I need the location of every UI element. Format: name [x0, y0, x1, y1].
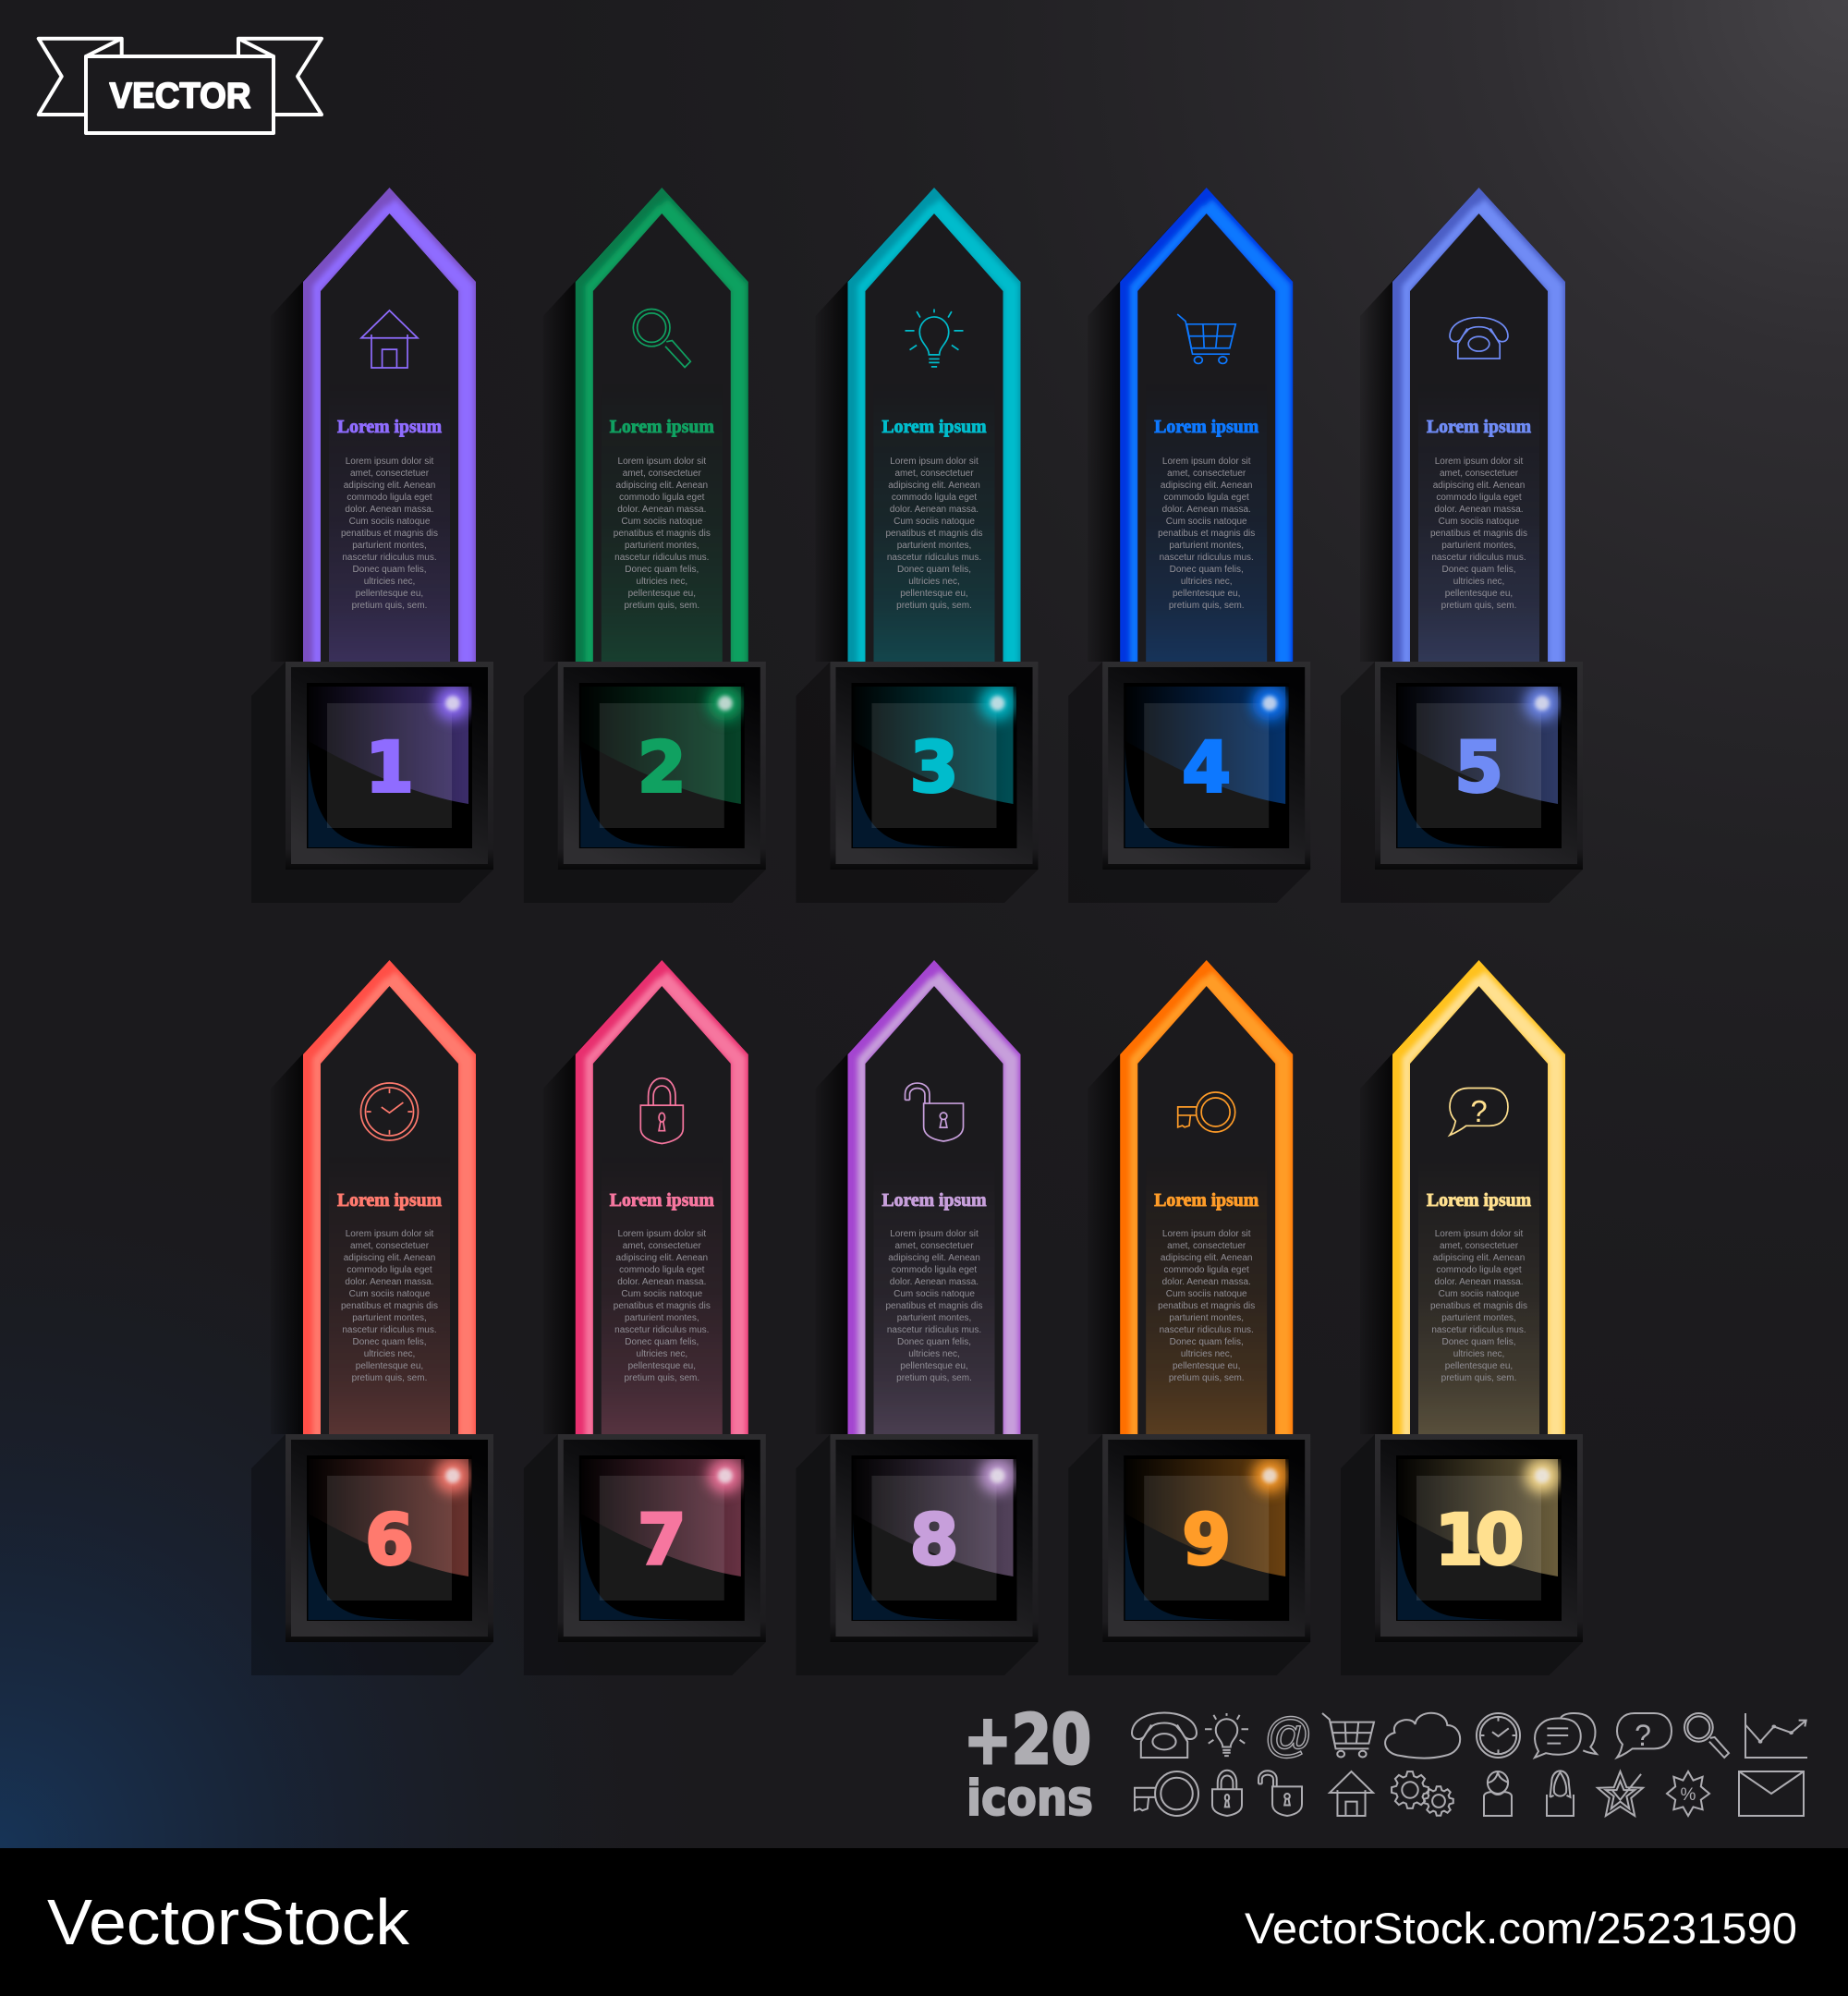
icon: telephone [1132, 1713, 1197, 1758]
text block: commodo ligula eget [619, 493, 705, 503]
text block: parturient montes, [625, 1313, 699, 1323]
number box 5 [1375, 662, 1583, 870]
icon: question speech bubble [1450, 1089, 1508, 1135]
icon: woman [1547, 1771, 1574, 1816]
icon set: twenty outline icons [1132, 1709, 1807, 1816]
text block: amet, consectetuer [1440, 1241, 1519, 1251]
number box 9 [1102, 1434, 1310, 1642]
text block: ultricies nec, [908, 1349, 960, 1359]
text block: pretium quis, sem. [896, 1373, 972, 1383]
text block: commodo ligula eget [1436, 493, 1522, 503]
number box 7 [558, 1434, 766, 1642]
heading: +20 icons: +20 [964, 1700, 1091, 1780]
text block: commodo ligula eget [892, 493, 977, 503]
number box 6: 6 [365, 1499, 414, 1580]
text block: ultricies nec, [908, 577, 960, 587]
text block: adipiscing elit. Aenean [1433, 481, 1525, 491]
arrow frame 6 [251, 960, 493, 1675]
text block: dolor. Aenean massa. [617, 1277, 706, 1287]
panel: card 8 [796, 960, 1039, 1675]
text block: parturient montes, [1441, 1313, 1516, 1323]
arrow frame 2 [524, 188, 766, 903]
text block: ultricies nec, [637, 1349, 687, 1359]
text block: dolor. Aenean massa. [890, 1277, 979, 1287]
text block: Lorem ipsum dolor sit [1435, 1229, 1524, 1239]
text block: commodo ligula eget [1164, 1265, 1249, 1275]
text block: adipiscing elit. Aenean [1161, 481, 1252, 491]
text block: Donec quam felis, [352, 565, 427, 575]
text block: pellentesque eu, [356, 1361, 423, 1371]
arrow frame 3 [796, 188, 1039, 903]
text block: amet, consectetuer [1440, 469, 1519, 479]
text block: adipiscing elit. Aenean [344, 1253, 435, 1263]
text block: pretium quis, sem. [1441, 1373, 1516, 1383]
icon: chat bubbles [1535, 1713, 1597, 1758]
text block: pellentesque eu, [1445, 1361, 1513, 1371]
icon: magnifier [633, 309, 690, 368]
icon: chart [1745, 1713, 1807, 1758]
heading: +20 icons: icons [967, 1771, 1093, 1827]
text block: Cum sociis natoque [894, 517, 975, 527]
text block: penatibus et magnis dis [1430, 1301, 1527, 1311]
icon: closed lock [640, 1078, 683, 1144]
heading: +20 icons [964, 1700, 1093, 1827]
panel: card 10 [1341, 960, 1583, 1675]
text block: Cum sociis natoque [349, 517, 431, 527]
text block: nascetur ridiculus mus. [614, 553, 709, 563]
text block: dolor. Aenean massa. [345, 505, 434, 515]
text block: adipiscing elit. Aenean [1433, 1253, 1525, 1263]
text block: pellentesque eu, [356, 589, 423, 599]
text block: Donec quam felis, [625, 1337, 699, 1347]
number box 3 [830, 662, 1039, 870]
text block: adipiscing elit. Aenean [344, 481, 435, 491]
arrow frame 9 [1068, 960, 1310, 1675]
text block: dolor. Aenean massa. [1434, 1277, 1524, 1287]
text block: amet, consectetuer [894, 1241, 974, 1251]
text block: dolor. Aenean massa. [1162, 505, 1251, 515]
text block: nascetur ridiculus mus. [342, 1325, 437, 1335]
text block: dolor. Aenean massa. [345, 1277, 434, 1287]
text block: amet, consectetuer [350, 1241, 430, 1251]
text block: Donec quam felis, [352, 1337, 427, 1347]
text block: pellentesque eu, [1173, 589, 1240, 599]
text block: Donec quam felis, [1441, 1337, 1516, 1347]
text block: nascetur ridiculus mus. [342, 553, 437, 563]
footer brand: VectorStock [47, 1886, 410, 1958]
text block: pretium quis, sem. [1441, 601, 1516, 611]
icon: star with check [1598, 1771, 1643, 1816]
arrow frame 8 [796, 960, 1039, 1675]
text block: pretium quis, sem. [624, 601, 699, 611]
panel: card 4 [1068, 188, 1310, 903]
text block: ultricies nec, [1453, 1349, 1504, 1359]
text block: Lorem ipsum dolor sit [1435, 456, 1524, 467]
text block: amet, consectetuer [1167, 1241, 1246, 1251]
number box 6 [286, 1434, 493, 1642]
heading: Lorem ipsum [881, 1190, 987, 1211]
text block: Lorem ipsum dolor sit [890, 456, 979, 467]
text block: adipiscing elit. Aenean [616, 481, 708, 491]
text block: adipiscing elit. Aenean [888, 1253, 980, 1263]
panel: card 5 [1341, 188, 1583, 903]
number box 4: 4 [1182, 726, 1231, 808]
icon: question bubble: ? [1635, 1719, 1651, 1752]
text block: pellentesque eu, [628, 1361, 696, 1371]
text block: parturient montes, [625, 541, 699, 551]
text block: pretium quis, sem. [896, 601, 972, 611]
heading: Lorem ipsum [337, 1190, 442, 1211]
panel: card 1 [251, 188, 493, 903]
text block: Cum sociis natoque [621, 517, 703, 527]
text block: Donec quam felis, [1170, 1337, 1244, 1347]
number box 9: 9 [1182, 1499, 1231, 1580]
number box 2 [558, 662, 766, 870]
text block: pretium quis, sem. [624, 1373, 699, 1383]
text block: Cum sociis natoque [1439, 1289, 1520, 1299]
text block: commodo ligula eget [619, 1265, 705, 1275]
heading: Lorem ipsum [1154, 1190, 1259, 1211]
icon: clock [360, 1083, 418, 1140]
badge: vector ribbon [39, 39, 322, 133]
number box 10: 10 [1435, 1499, 1521, 1580]
text block: ultricies nec, [364, 1349, 415, 1359]
icon: clock [1477, 1713, 1520, 1758]
icon: bulb [1205, 1713, 1248, 1756]
icon: key [1135, 1771, 1198, 1816]
text block: pellentesque eu, [900, 589, 968, 599]
number box 5: 5 [1454, 726, 1503, 808]
text block: Cum sociis natoque [1166, 1289, 1247, 1299]
text block: pretium quis, sem. [352, 1373, 427, 1383]
text block: parturient montes, [897, 1313, 971, 1323]
text block: Lorem ipsum dolor sit [890, 1229, 979, 1239]
text block: commodo ligula eget [346, 1265, 432, 1275]
panel: card 6 [251, 960, 493, 1675]
text block: Donec quam felis, [1170, 565, 1244, 575]
arrow frame 5 [1341, 188, 1583, 903]
arrow frame 1 [251, 188, 493, 903]
icon: gears [1392, 1771, 1453, 1816]
text block: Cum sociis natoque [621, 1289, 703, 1299]
arrow frame 10 [1341, 960, 1583, 1675]
text block: commodo ligula eget [1436, 1265, 1522, 1275]
icon: shopping cart [1177, 314, 1235, 363]
text block: dolor. Aenean massa. [890, 505, 979, 515]
heading: Lorem ipsum [610, 417, 714, 437]
text block: pellentesque eu, [1445, 589, 1513, 599]
heading: Lorem ipsum [1154, 417, 1259, 437]
icon: house [1330, 1771, 1373, 1816]
text block: pretium quis, sem. [1169, 1373, 1245, 1383]
number box 3: 3 [910, 726, 958, 808]
heading: Lorem ipsum [337, 417, 442, 437]
text block: ultricies nec, [1453, 577, 1504, 587]
panel: card 7 [524, 960, 766, 1675]
text block: Lorem ipsum dolor sit [346, 456, 434, 467]
text block: ultricies nec, [364, 577, 415, 587]
text block: Cum sociis natoque [349, 1289, 431, 1299]
icon: telephone [1450, 318, 1508, 359]
icon: open lock [1258, 1771, 1302, 1816]
icon: question bubble [1617, 1713, 1672, 1758]
text block: ultricies nec, [1181, 1349, 1232, 1359]
text block: dolor. Aenean massa. [617, 505, 706, 515]
text block: Lorem ipsum dolor sit [618, 1229, 706, 1239]
text block: amet, consectetuer [1167, 469, 1246, 479]
icon: question speech bubble: ? [1470, 1094, 1488, 1128]
icon: percent badge: % [1681, 1785, 1696, 1805]
icon: percent badge [1667, 1771, 1709, 1816]
text block: parturient montes, [352, 541, 427, 551]
heading: Lorem ipsum [1427, 1190, 1531, 1211]
text block: commodo ligula eget [346, 493, 432, 503]
text block: Cum sociis natoque [1439, 517, 1520, 527]
text block: penatibus et magnis dis [341, 1301, 438, 1311]
text block: nascetur ridiculus mus. [1160, 1325, 1254, 1335]
text block: Cum sociis natoque [1166, 517, 1247, 527]
text block: nascetur ridiculus mus. [887, 553, 981, 563]
heading: Lorem ipsum [881, 417, 987, 437]
text block: parturient montes, [897, 541, 971, 551]
icon: envelope [1739, 1771, 1804, 1816]
text block: amet, consectetuer [350, 469, 430, 479]
text block: adipiscing elit. Aenean [888, 481, 980, 491]
text block: nascetur ridiculus mus. [614, 1325, 709, 1335]
icon: house [361, 310, 418, 368]
text block: Donec quam felis, [625, 565, 699, 575]
panel: card 9 [1068, 960, 1310, 1675]
text block: penatibus et magnis dis [614, 1301, 711, 1311]
text block: dolor. Aenean massa. [1162, 1277, 1251, 1287]
text block: Lorem ipsum dolor sit [1162, 456, 1251, 467]
icon: open lock [906, 1083, 963, 1141]
text block: penatibus et magnis dis [1158, 1301, 1255, 1311]
text block: pretium quis, sem. [352, 601, 427, 611]
arrow frame 4 [1068, 188, 1310, 903]
text block: commodo ligula eget [1164, 493, 1249, 503]
text block: penatibus et magnis dis [885, 1301, 983, 1311]
panel: card 3 [796, 188, 1039, 903]
text block: Donec quam felis, [897, 565, 971, 575]
icon: key [1178, 1092, 1235, 1132]
text block: penatibus et magnis dis [614, 529, 711, 539]
text block: Cum sociis natoque [894, 1289, 975, 1299]
text block: nascetur ridiculus mus. [887, 1325, 981, 1335]
icon: magnifier [1684, 1713, 1729, 1758]
number box 4 [1102, 662, 1310, 870]
number box 1 [286, 662, 493, 870]
text block: penatibus et magnis dis [1430, 529, 1527, 539]
text block: penatibus et magnis dis [885, 529, 983, 539]
text block: penatibus et magnis dis [1158, 529, 1255, 539]
icon: at sign: @ [1264, 1709, 1313, 1762]
icon: light bulb [906, 309, 963, 367]
text block: nascetur ridiculus mus. [1160, 553, 1254, 563]
text block: parturient montes, [1441, 541, 1516, 551]
number box 8: 8 [910, 1499, 958, 1580]
icon: cart [1322, 1713, 1374, 1758]
text block: ultricies nec, [1181, 577, 1232, 587]
text block: Donec quam felis, [897, 1337, 971, 1347]
heading: Lorem ipsum [1427, 417, 1531, 437]
text block: pellentesque eu, [1173, 1361, 1240, 1371]
text block: adipiscing elit. Aenean [1161, 1253, 1252, 1263]
text block: adipiscing elit. Aenean [616, 1253, 708, 1263]
panel: card 2 [524, 188, 766, 903]
text block: commodo ligula eget [892, 1265, 977, 1275]
text block: parturient montes, [1169, 1313, 1244, 1323]
text block: parturient montes, [1169, 541, 1244, 551]
text block: amet, consectetuer [623, 1241, 701, 1251]
text block: amet, consectetuer [894, 469, 974, 479]
text block: Donec quam felis, [1441, 565, 1516, 575]
number box 1: 1 [365, 726, 414, 808]
text block: pellentesque eu, [628, 589, 696, 599]
text block: Lorem ipsum dolor sit [618, 456, 706, 467]
text block: nascetur ridiculus mus. [1431, 1325, 1526, 1335]
text block: dolor. Aenean massa. [1434, 505, 1524, 515]
icon: lock [1212, 1771, 1242, 1816]
number box 2: 2 [638, 726, 687, 808]
icon: man [1484, 1771, 1512, 1816]
footer url: VectorStock.com/25231590 [1245, 1904, 1797, 1953]
text block: parturient montes, [352, 1313, 427, 1323]
text block: pretium quis, sem. [1169, 601, 1245, 611]
footer bar [0, 1848, 1848, 1996]
text block: pellentesque eu, [900, 1361, 968, 1371]
icon: cloud [1385, 1713, 1460, 1759]
badge: vector ribbon: VECTOR [109, 76, 251, 116]
text block: penatibus et magnis dis [341, 529, 438, 539]
text block: nascetur ridiculus mus. [1431, 553, 1526, 563]
heading: Lorem ipsum [610, 1190, 714, 1211]
number box 10 [1375, 1434, 1583, 1642]
number box 7: 7 [638, 1499, 687, 1580]
text block: amet, consectetuer [623, 469, 701, 479]
arrow frame 7 [524, 960, 766, 1675]
text block: Lorem ipsum dolor sit [1162, 1229, 1251, 1239]
text block: Lorem ipsum dolor sit [346, 1229, 434, 1239]
number box 8 [830, 1434, 1039, 1642]
text block: ultricies nec, [637, 577, 687, 587]
